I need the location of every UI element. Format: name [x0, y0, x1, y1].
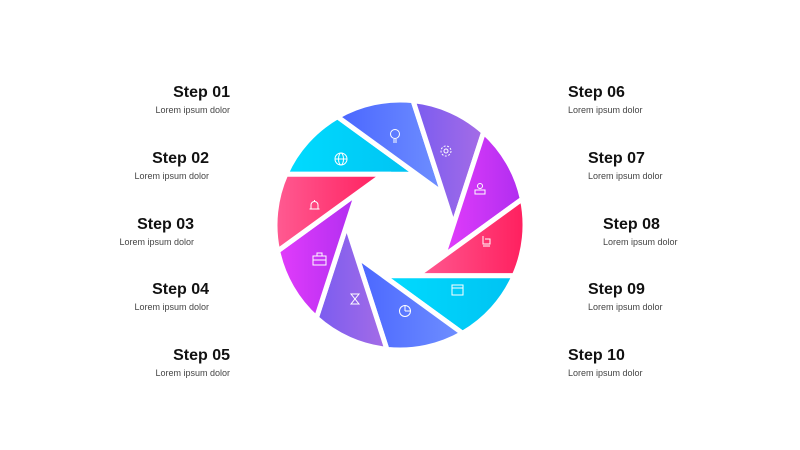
label: step 08: Step 08	[603, 216, 660, 233]
icon: hourglass	[351, 294, 359, 304]
label: step 10: Step 10	[568, 347, 625, 364]
blade: briefcase	[278, 194, 357, 318]
label: step 07	[588, 150, 663, 181]
label: step 06	[568, 84, 643, 115]
blade: bell	[275, 174, 384, 251]
label: step 06: Step 06	[568, 84, 625, 101]
blade: bulb	[338, 100, 443, 194]
icon: globe	[335, 153, 347, 165]
icon: bulb	[390, 130, 400, 142]
icon: bell	[310, 200, 320, 209]
label: step 04	[134, 281, 209, 312]
label: step 05: Lorem ipsum dolor	[155, 368, 230, 378]
label: step 04: Lorem ipsum dolor	[134, 302, 209, 312]
icon: gear	[441, 146, 451, 156]
label: step 02: Step 02	[152, 150, 209, 167]
label: step 05: Step 05	[173, 347, 230, 364]
label: step 01	[155, 84, 230, 115]
label: step 01: Lorem ipsum dolor	[155, 105, 230, 115]
icon: calendar	[452, 285, 463, 295]
label: step 03	[119, 216, 194, 247]
icon: person	[475, 184, 485, 194]
label: step 09	[588, 281, 663, 312]
label: step 04: Step 04	[152, 281, 209, 298]
blade: pie	[357, 256, 462, 350]
label: step 09: Step 09	[588, 281, 645, 298]
label: step 09: Lorem ipsum dolor	[588, 302, 663, 312]
label: step 03: Step 03	[137, 216, 194, 233]
label: step 10: Lorem ipsum dolor	[568, 368, 643, 378]
icon: briefcase	[313, 253, 326, 265]
label: step 10	[568, 347, 643, 378]
label: step 08: Lorem ipsum dolor	[603, 237, 678, 247]
label: step 07: Step 07	[588, 150, 645, 167]
label: step 08	[603, 216, 678, 247]
icon: pie	[400, 306, 410, 316]
blade: person	[443, 132, 522, 256]
label: step 05	[155, 347, 230, 378]
blade: gear	[413, 101, 484, 225]
blade: hourglass	[316, 225, 387, 349]
blade: calendar	[383, 276, 514, 333]
blade: hand	[416, 199, 525, 276]
label: step 07: Lorem ipsum dolor	[588, 171, 663, 181]
icon: hand	[483, 236, 490, 246]
label: step 03: Lorem ipsum dolor	[119, 237, 194, 247]
label: step 02: Lorem ipsum dolor	[134, 171, 209, 181]
label: step 02	[134, 150, 209, 181]
blade: globe	[286, 117, 417, 174]
label: step 06: Lorem ipsum dolor	[568, 105, 643, 115]
label: step 01: Step 01	[173, 84, 230, 101]
